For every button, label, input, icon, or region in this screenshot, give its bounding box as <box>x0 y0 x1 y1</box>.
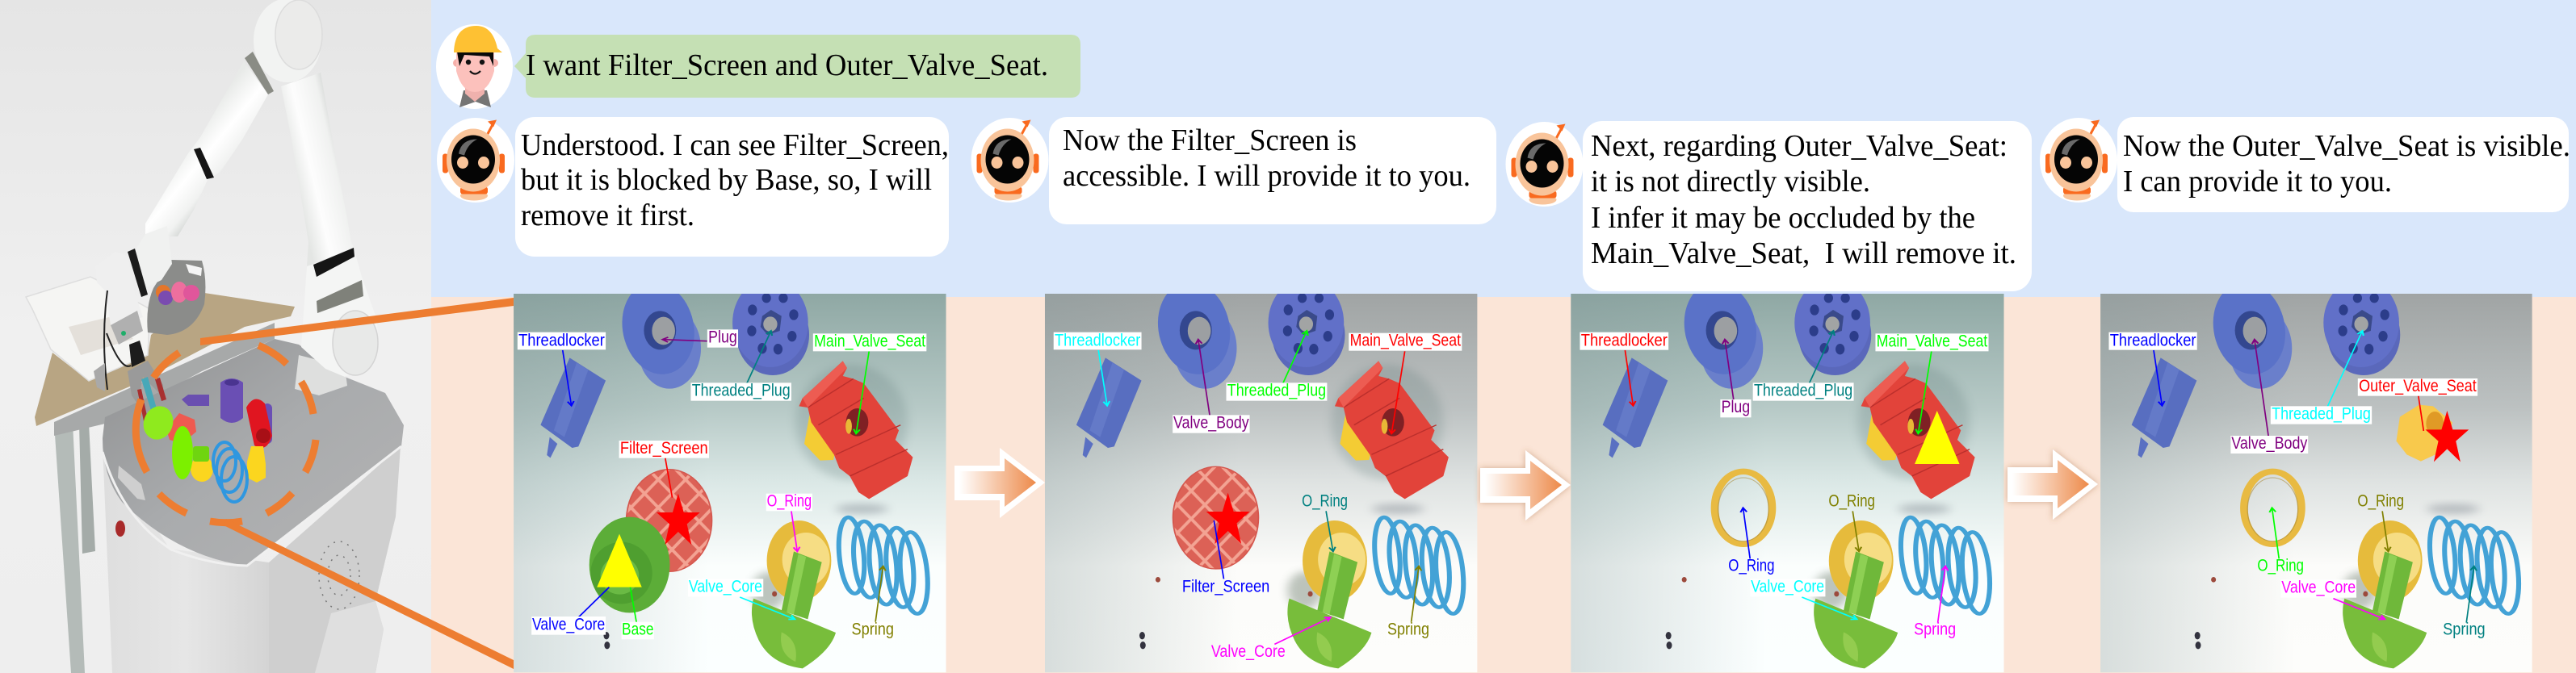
panel: dialogue background <box>431 0 2576 297</box>
label: Threadlocker <box>1054 331 1142 406</box>
label: Main_Valve_Seat <box>813 332 926 433</box>
icon: robot avatar 4 <box>2040 118 2117 203</box>
label: Valve_Core: Valve_Core <box>2281 578 2356 597</box>
label: Threaded_Plug <box>1753 331 1854 401</box>
label: Valve_Core <box>1750 577 1856 619</box>
label: Threadlocker: Threadlocker <box>2110 331 2196 350</box>
robot bubble 3: I infer it may be occluded by the <box>1591 201 1975 235</box>
label: Plug: Plug <box>1722 398 1750 416</box>
marker: target star <box>2425 411 2469 462</box>
robot bubble 2: accessible. I will provide it to you. <box>1063 159 1471 193</box>
label: Filter_Screen <box>1182 520 1269 596</box>
label: Threaded_Plug <box>690 331 791 401</box>
robot bubble 4: Now the Outer_Valve_Seat is visible. <box>2123 129 2570 163</box>
label: Filter_Screen <box>619 439 709 498</box>
white tray <box>26 277 156 381</box>
panel: perception background <box>431 297 2576 673</box>
label: O_Ring olive: O_Ring <box>1828 492 1875 511</box>
orange dashed ellipse <box>136 345 316 523</box>
robot bubble 4: I can provide it to you. <box>2123 165 2392 199</box>
label: Main_Valve_Seat: Main_Valve_Seat <box>814 332 925 351</box>
icon: robot avatar 3 <box>1505 122 1583 207</box>
grey bowl with balls <box>147 260 205 335</box>
label: Spring: Spring <box>1914 621 1956 639</box>
arrow: step 3 to 4 <box>2008 449 2098 520</box>
object: base <box>589 517 669 612</box>
marker: target star <box>657 494 700 545</box>
label: Threadlocker <box>2108 331 2197 406</box>
label: Spring <box>2443 566 2486 639</box>
label: Valve_Core blue <box>531 587 609 635</box>
icon: robot avatar 1 <box>437 118 514 203</box>
robot arm <box>94 0 378 421</box>
marker: target star <box>1206 493 1250 544</box>
label: O_Ring: O_Ring <box>767 492 812 511</box>
label: O_Ring <box>1302 492 1348 551</box>
label: Threadlocker: Threadlocker <box>1055 331 1140 350</box>
zoom line: top <box>200 298 514 345</box>
label: O_Ring olive <box>2357 492 2404 551</box>
photo: robot arm on mobile base <box>0 0 431 673</box>
label: Valve_Core: Valve_Core <box>1751 577 1824 596</box>
label: O_Ring blue: O_Ring <box>1728 557 1775 575</box>
robot bubble 3 <box>1583 121 2032 291</box>
robot bubble 2: Now the Filter_Screen is <box>1063 123 1357 157</box>
scene 4: Outer_Valve_Seat visible <box>2100 278 2532 672</box>
label: Valve_Core cyan: Valve_Core <box>689 577 762 596</box>
label: Valve_Body: Valve_Body <box>2231 434 2308 453</box>
label: O_Ring green <box>2257 508 2304 575</box>
icon: user avatar <box>436 24 513 109</box>
label: Main_Valve_Seat <box>1875 332 1989 433</box>
label: Threaded_Plug <box>2271 331 2372 424</box>
marker: obstacle triangle <box>1915 411 1960 464</box>
arrow: step 2 to 3 <box>1480 450 1571 520</box>
label: Plug: Plug <box>708 328 737 347</box>
label: O_Ring <box>766 492 812 551</box>
label: Filter_Screen: Filter_Screen <box>1182 577 1269 596</box>
label: Valve_Body <box>1173 340 1250 433</box>
label: Threaded_Plug: Threaded_Plug <box>1754 381 1852 400</box>
robot bubble 4 <box>2117 117 2570 212</box>
label: Valve_Body <box>2230 340 2308 454</box>
label: Outer_Valve_Seat <box>2358 377 2477 431</box>
arrow: step 1 to 2 <box>954 448 1045 518</box>
table with legs <box>35 293 295 673</box>
label: Valve_Core: Valve_Core <box>1211 642 1286 661</box>
label: Valve_Core <box>2280 578 2385 619</box>
label: Filter_Screen: Filter_Screen <box>620 439 708 458</box>
label: O_Ring blue <box>1728 508 1775 575</box>
user message bubble: I want Filter_Screen and Outer_Valve_Seat. <box>526 48 1048 82</box>
label: Valve_Core cyan <box>688 577 795 619</box>
label: Valve_Core <box>1211 617 1331 661</box>
label: Threaded_Plug: Threaded_Plug <box>692 381 791 400</box>
label: Main_Valve_Seat: Main_Valve_Seat <box>1350 332 1461 350</box>
label: O_Ring olive <box>1828 492 1875 551</box>
robot bubble 1: but it is blocked by Base, so, I will <box>521 163 932 197</box>
robot bubble 3: Next, regarding Outer_Valve_Seat: <box>1591 129 2008 163</box>
label: Spring <box>851 566 895 639</box>
label: Threadlocker: Threadlocker <box>1581 331 1668 350</box>
label: Valve_Body: Valve_Body <box>1173 413 1249 433</box>
robot bubble 1: remove it first. <box>521 199 694 232</box>
zoom line: bottom <box>224 519 517 671</box>
robot bubble 1 <box>515 117 949 257</box>
scene 2: Filter_Screen accessible <box>1045 278 1477 672</box>
label: Spring <box>1387 566 1430 639</box>
label: Plug <box>662 328 738 348</box>
user message bubble <box>514 35 1080 98</box>
label: Plug <box>1720 340 1752 417</box>
label: Spring <box>1914 566 1956 639</box>
label: O_Ring: O_Ring <box>1302 492 1348 511</box>
icon: robot avatar 2 <box>971 118 1048 203</box>
robot bubble 2 <box>1049 117 1496 224</box>
label: Spring: Spring <box>852 621 894 639</box>
robot bubble 3: Main_Valve_Seat, I will remove it. <box>1591 236 2016 270</box>
label: Main_Valve_Seat <box>1349 332 1462 433</box>
object: outer valve seat <box>2397 405 2452 462</box>
label: Threadlocker: Threadlocker <box>518 331 605 350</box>
robot bubble 1: Understood. I can see Filter_Screen, <box>521 128 949 162</box>
label: Valve_Core blue: Valve_Core <box>532 615 605 634</box>
scene 1: camera view with Base blocking Filter_Screen <box>514 278 946 672</box>
mobile base cabinet <box>103 339 404 673</box>
parts on the plate <box>139 378 272 502</box>
marker: obstacle triangle <box>597 534 642 587</box>
label: Threadlocker <box>518 331 606 406</box>
label: Spring: Spring <box>2443 621 2486 639</box>
scene 3: Main_Valve_Seat to remove <box>1571 278 2004 672</box>
label: O_Ring olive: O_Ring <box>2357 492 2404 511</box>
label: Base <box>622 587 654 639</box>
label: Threaded_Plug: Threaded_Plug <box>2272 404 2371 424</box>
label: Spring: Spring <box>1387 621 1429 639</box>
label: Main_Valve_Seat: Main_Valve_Seat <box>1877 332 1987 351</box>
label: Threaded_Plug <box>1227 331 1327 401</box>
label: Threadlocker <box>1580 331 1668 406</box>
label: Threaded_Plug: Threaded_Plug <box>1227 381 1326 400</box>
robot bubble 3: it is not directly visible. <box>1591 165 1870 199</box>
label: O_Ring green: O_Ring <box>2257 557 2304 575</box>
label: Base: Base <box>622 621 654 639</box>
label: Outer_Valve_Seat: Outer_Valve_Seat <box>2359 377 2477 395</box>
